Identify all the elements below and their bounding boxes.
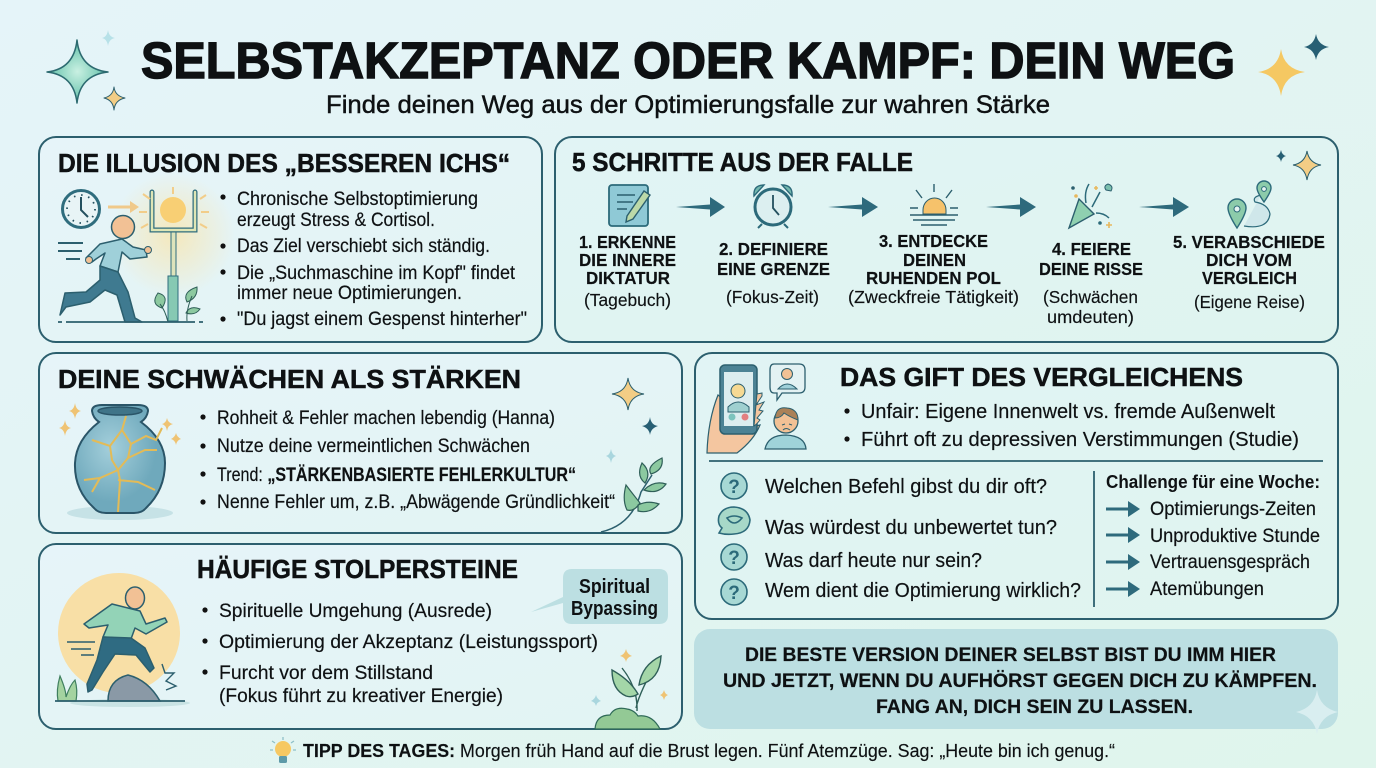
- sparkles: steps panel: [1276, 150, 1321, 180]
- title: SELBSTAKZEPTANZ ODER KAMPF: DEIN WEG: [141, 32, 1235, 89]
- panel: Häufige Stolpersteine: [39, 544, 682, 729]
- tip of the day: TIPP DES TAGES: Morgen früh Hand auf die Brust legen. Fünf Atemzüge. Sag: „Heute bin ich genug.“: [303, 740, 1115, 761]
- bullets: Schwächen: Nenne Fehler um, z.B. „Abwägende Gründlichkeit“: [217, 492, 615, 513]
- step 3 text: 3. ENTDECKE: [879, 231, 988, 251]
- icon: sun on horizon: [910, 184, 958, 225]
- sparkles and leaf sprig: [601, 378, 666, 532]
- heading: Gift des Vergleichens: DAS GIFT DES VERGLEICHENS: [840, 362, 1243, 392]
- question icons: ?: [728, 477, 740, 498]
- icon: route pins: [1228, 181, 1271, 228]
- bullets: Illusion: [220, 189, 527, 330]
- step 1 text: [579, 232, 676, 310]
- question icons: ?: [728, 548, 740, 569]
- bullets: Schwächen: Nutze deine vermeintlichen Schwächen: [217, 436, 530, 457]
- panel: Das Gift des Vergleichens: [695, 353, 1338, 619]
- challenge list: Unproduktive Stunde: [1150, 526, 1320, 547]
- arrow 1: [676, 197, 725, 217]
- bullets: Illusion: Das Ziel verschiebt sich ständig.: [237, 236, 490, 257]
- questions: Was darf heute nur sein?: [765, 549, 982, 572]
- panel: closing message: UND JETZT, WENN DU AUFHÖRST GEGEN DICH ZU KÄMPFEN.: [723, 669, 1317, 692]
- step 3 text: [848, 231, 1019, 307]
- step 1 text: DIE INNERE: [579, 250, 676, 270]
- icon: light bulb: [270, 737, 296, 763]
- icon: notebook: [609, 185, 650, 226]
- bullets: Vergleichen: [844, 400, 1299, 451]
- step 5 text: 5. VERABSCHIEDE: [1173, 232, 1325, 252]
- panel: closing message: [694, 629, 1338, 734]
- bullets: Schwächen: Trend: „STÄRKENBASIERTE FEHLERKULTUR“: [217, 465, 576, 486]
- step 2 text: (Fokus-Zeit): [726, 287, 819, 307]
- challenge list: Atemübungen: [1150, 579, 1264, 600]
- heading: Stolpersteine: HÄUFIGE STOLPERSTEINE: [197, 554, 518, 584]
- step 3 text: RUHENDEN POL: [866, 268, 1001, 288]
- step 1 text: DIKTATUR: [586, 268, 670, 288]
- questions: Welchen Befehl gibst du dir oft?: [765, 475, 1047, 498]
- bullets: Schwächen: Rohheit & Fehler machen lebendig (Hanna): [217, 408, 555, 429]
- step 4 text: [1039, 239, 1143, 327]
- step 5 text: [1173, 232, 1325, 312]
- decorative sparkles: header left: [47, 30, 125, 110]
- bullets: Vergleichen: Führt oft zu depressiven Verstimmungen (Studie): [861, 428, 1299, 451]
- step 4 text: umdeuten): [1047, 307, 1134, 327]
- heading: 5 Schritte: 5 SCHRITTE AUS DER FALLE: [572, 147, 913, 177]
- icon: kintsugi vase: [59, 403, 181, 520]
- arrow 4: [1139, 197, 1189, 217]
- icon: phone comparison: [707, 364, 806, 453]
- step 4 text: DEINE RISSE: [1039, 259, 1143, 279]
- challenge list: Optimierungs-Zeiten: [1150, 499, 1316, 520]
- step 2 text: 2. DEFINIERE: [719, 239, 828, 259]
- challenge list: Challenge für eine Woche:: [1106, 472, 1320, 492]
- step 4 text: (Schwächen: [1043, 287, 1138, 307]
- decorative sparkles: header right: [1258, 34, 1329, 96]
- bullets: Illusion: "Du jagst einem Gespenst hinterher": [237, 309, 527, 330]
- questions: Was würdest du unbewertet tun?: [765, 516, 1057, 539]
- heading: Schwächen: DEINE SCHWÄCHEN ALS STÄRKEN: [58, 364, 521, 394]
- step 5 text: (Eigene Reise): [1194, 292, 1305, 312]
- bullets: Stolpersteine: Spirituelle Umgehung (Ausrede): [219, 601, 492, 622]
- icon: runner chasing goalpost: [58, 173, 235, 322]
- callout: Spiritual Bypassing: Spiritual: [579, 576, 650, 598]
- questions: Wem dient die Optimierung wirklich?: [765, 579, 1081, 602]
- icon: figure tripping over stone: [55, 573, 190, 707]
- bullets: Stolpersteine: Furcht vor dem Stillstand: [219, 663, 433, 684]
- bullets: Illusion: Die „Suchmaschine im Kopf" findet: [237, 263, 516, 284]
- bullets: Vergleichen: Unfair: Eigene Innenwelt vs. fremde Außenwelt: [861, 400, 1275, 423]
- panel: Die Illusion des besseren Ichs: [39, 137, 542, 342]
- panel: Deine Schwächen als Stärken: [39, 353, 682, 533]
- step 3 text: DEINEN: [903, 250, 966, 270]
- bullets: Stolpersteine: [202, 601, 598, 707]
- icon: party popper: [1069, 184, 1112, 228]
- panel: closing message: FANG AN, DICH SEIN ZU LASSEN.: [876, 696, 1193, 718]
- step 2 text: EINE GRENZE: [717, 259, 830, 279]
- bullets: Stolpersteine: Optimierung der Akzeptanz (Leistungssport): [219, 632, 598, 653]
- step 2 text: [717, 239, 830, 307]
- panel: 5 Schritte aus der Falle: [555, 137, 1338, 342]
- callout: Spiritual Bypassing: Bypassing: [571, 598, 658, 620]
- bullets: Stolpersteine: (Fokus führt zu kreativer Energie): [219, 686, 503, 707]
- arrow 2: [828, 197, 878, 217]
- questions: [765, 475, 1081, 602]
- bullets: Illusion: erzeugt Stress & Cortisol.: [237, 210, 435, 231]
- bullets: Illusion: Chronische Selbstoptimierung: [237, 189, 478, 210]
- callout: Spiritual Bypassing: [531, 569, 668, 624]
- step 1 text: (Tagebuch): [584, 290, 671, 310]
- step 1 text: 1. ERKENNE: [579, 232, 676, 252]
- icon: sprout with sparkles: [591, 649, 668, 729]
- step 3 text: (Zweckfreie Tätigkeit): [848, 287, 1019, 307]
- challenge list: Vertrauensgespräch: [1150, 552, 1310, 573]
- heading: Illusion: DIE ILLUSION DES „BESSEREN ICHS“: [58, 148, 510, 178]
- arrow 3: [986, 197, 1036, 217]
- subtitle: Finde deinen Weg aus der Optimierungsfalle zur wahren Stärke: [326, 91, 1050, 119]
- question icons: [718, 473, 750, 605]
- step 5 text: VERGLEICH: [1202, 268, 1297, 288]
- icon: alarm clock: [754, 185, 792, 228]
- bullets: Schwächen: [200, 408, 615, 513]
- step 5 text: DICH VOM: [1206, 250, 1292, 270]
- panel: closing message: DIE BESTE VERSION DEINER SELBST BIST DU IMM HIER: [745, 644, 1276, 666]
- step 4 text: 4. FEIERE: [1052, 239, 1131, 259]
- bullets: Illusion: immer neue Optimierungen.: [237, 283, 462, 304]
- question icons: ?: [728, 583, 740, 604]
- challenge list: [1106, 472, 1320, 600]
